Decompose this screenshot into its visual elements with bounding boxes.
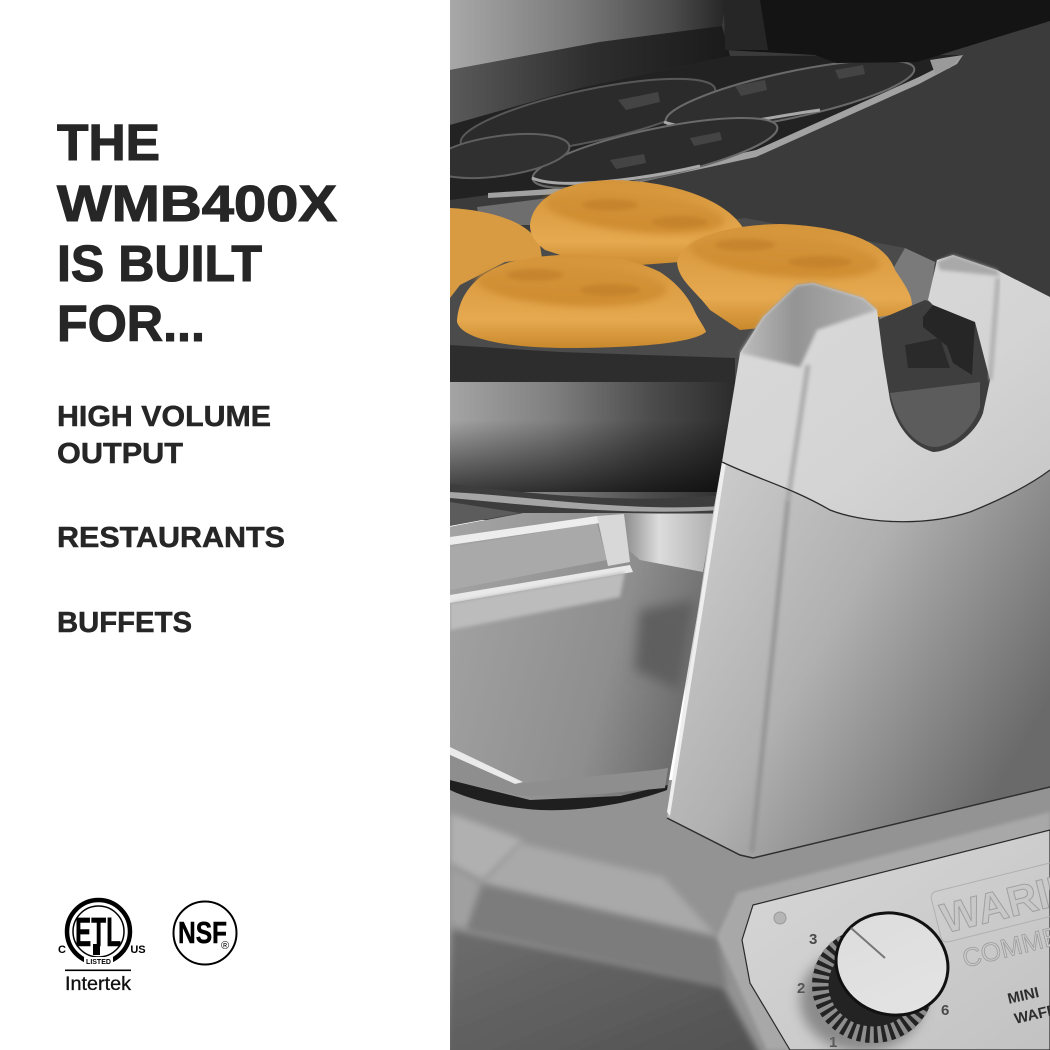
base of waffle maker xyxy=(445,780,1050,1050)
logo: NSF: ® xyxy=(221,940,229,952)
use case: high volume output: OUTPUT xyxy=(57,438,183,470)
product photo: waffle maker xyxy=(428,0,1050,1050)
model label: MINI xyxy=(1006,984,1041,1008)
heading: WMB400X xyxy=(57,175,337,232)
grooves xyxy=(788,365,808,500)
right wall top facet xyxy=(937,255,1000,276)
use case: high volume output xyxy=(57,401,271,470)
logo: ETL listed Intertek xyxy=(58,900,146,995)
logo: ETL listed Intertek: Intertek xyxy=(65,974,132,995)
waffle: left xyxy=(450,208,542,298)
heading: IS BUILT xyxy=(57,235,262,292)
logo: ETL listed Intertek: US xyxy=(130,944,146,956)
open lid of waffle maker xyxy=(428,0,963,225)
waffle: front xyxy=(457,255,706,348)
logo: ETL listed Intertek: ETL xyxy=(75,909,121,955)
waffle: right xyxy=(677,224,912,330)
lower cooking plate xyxy=(450,218,935,390)
top facet xyxy=(740,283,877,367)
left white panel xyxy=(0,0,450,1050)
heading: THE xyxy=(57,114,160,171)
seam line xyxy=(722,462,1050,522)
drip tray xyxy=(450,513,713,810)
logo: NSF: NSF xyxy=(178,915,227,950)
control panel xyxy=(717,812,1050,1050)
use case: buffets: BUFFETS xyxy=(57,607,192,639)
dial numbers xyxy=(797,931,949,1050)
dial numbers: 6 xyxy=(941,1002,949,1019)
shadow under knob xyxy=(800,948,924,1050)
logo: NSF xyxy=(174,902,236,964)
dial numbers: 3 xyxy=(809,931,817,948)
heading xyxy=(57,114,337,352)
use case: restaurants: RESTAURANTS xyxy=(57,522,285,554)
waffle: back xyxy=(530,180,748,268)
heading: FOR... xyxy=(57,295,205,352)
logo: ETL listed Intertek: LISTED xyxy=(86,959,111,966)
hinge tower lower housing xyxy=(667,462,1050,858)
latch inside notch xyxy=(878,300,980,447)
stainless lower housing xyxy=(450,382,737,526)
dark backdrop xyxy=(450,0,1050,520)
indicator light xyxy=(774,912,786,924)
embossed brand xyxy=(930,862,1050,966)
black handle xyxy=(724,0,1050,63)
hinge tower upper housing with notch xyxy=(722,255,1050,522)
control knob xyxy=(812,911,950,1043)
model label xyxy=(1008,987,1050,1024)
logo: ETL listed Intertek: C xyxy=(58,944,66,956)
use case: high volume output: HIGH VOLUME xyxy=(57,401,271,433)
dial numbers: 2 xyxy=(797,980,805,997)
